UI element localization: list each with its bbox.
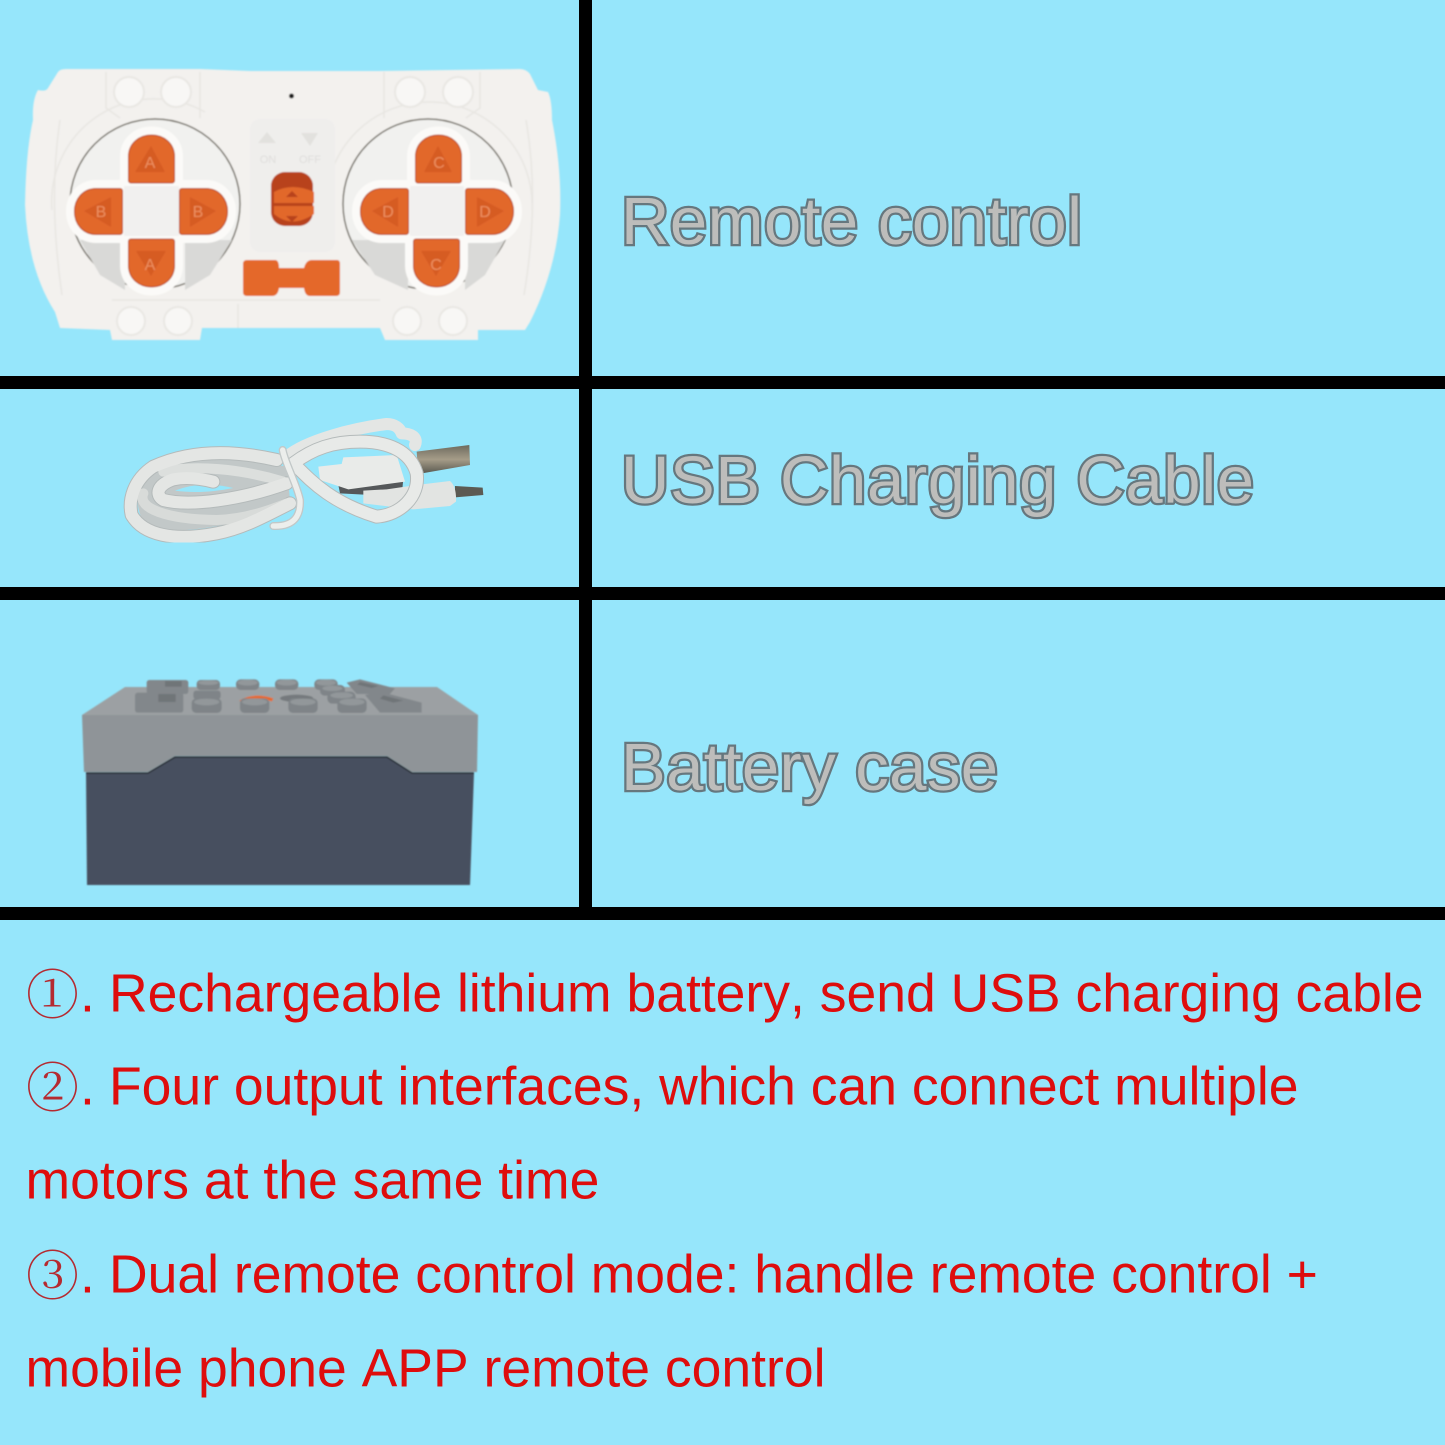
feature 2 line 1: Four output interfaces, which can connect multiple [109,1058,1299,1116]
studs [114,77,473,335]
cable strands [131,424,416,537]
feature 3 line 2: mobile phone APP remote control [26,1340,825,1398]
dark gap behind connectors [338,478,403,497]
table grid lines [0,0,1445,920]
button halos [74,135,514,287]
cable loop gap [175,485,233,492]
battery upper band [82,715,478,772]
button letters: C [433,155,445,172]
feature 2 line 2: motors at the same time [26,1152,599,1210]
hollow connectors [135,679,422,713]
battery top face [82,687,478,715]
feature list [26,954,1423,1398]
cable shadow mass [138,460,290,530]
battery lower housing [86,757,474,885]
label: remote control: Remote control [621,184,1082,259]
button letters: B [193,204,203,221]
orange buttons [74,135,514,287]
left dial [70,119,240,290]
button letters: D [382,204,394,221]
icon: remote control photo [25,69,560,340]
icon: USB charging cable photo [131,424,483,537]
feature 1: . [80,964,95,1024]
stud highlights [194,680,365,705]
feature 1: ① [26,954,79,1030]
connector holes [158,681,403,703]
button letters: D [479,204,491,221]
button triangles [84,146,504,276]
USB-A plug [417,445,470,474]
dial centres [124,186,179,236]
USB-C plug [455,486,483,497]
label: USB charging cable: USB Charging Cable [621,443,1254,518]
cable tie strand [273,450,300,526]
power switch panel [250,119,335,252]
button letters: A [145,257,156,274]
feature 3 line 1: . [80,1246,95,1304]
button letters: A [145,155,156,172]
orange bar button [243,260,340,296]
remote body [25,69,560,340]
rear studs [193,679,356,704]
power switch panel: OFF [299,154,321,166]
feature 3 line 1: Dual remote control mode: handle remote control + [109,1246,1318,1304]
feature 2 line 1: . [80,1058,95,1116]
seam line [86,757,474,773]
label: battery case: Battery case [621,730,998,805]
cable strand shadows [131,453,290,537]
right dial [343,119,513,290]
orange indicator [239,696,273,702]
body relief lines [52,72,533,328]
USB-A molding [318,455,405,489]
power indicator hole [289,94,294,98]
feature 2 line 1: ② [26,1046,79,1122]
power switch panel: ON [260,154,276,166]
battery top connectors [135,679,422,713]
button letters: C [430,257,442,274]
icon: battery case photo [82,679,478,885]
USB-C molding [363,481,456,509]
feature 1: Rechargeable lithium battery, send USB charging cable [109,964,1423,1024]
button letters: B [96,204,106,221]
cable right loop [293,442,417,517]
feature 3 line 1: ③ [26,1234,79,1310]
front studs [192,698,367,713]
button letters [96,155,491,274]
